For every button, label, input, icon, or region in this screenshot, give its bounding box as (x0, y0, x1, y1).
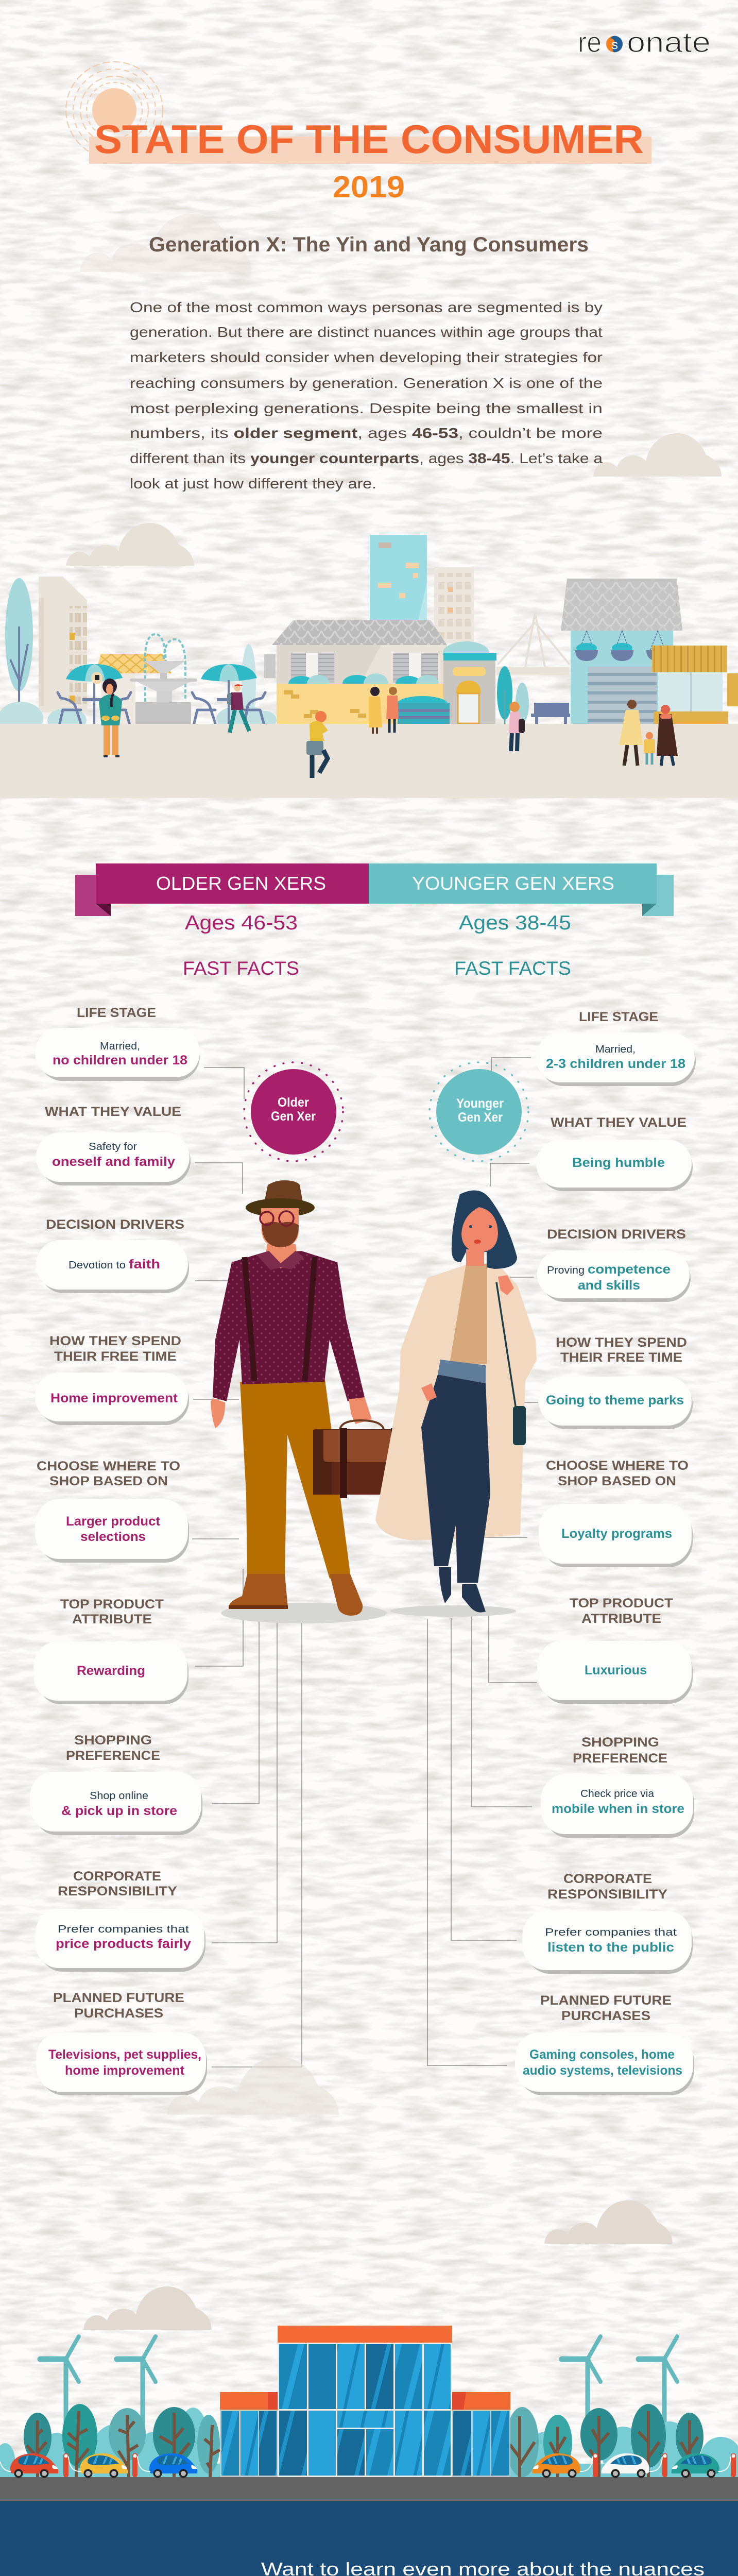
figure shadows (221, 1603, 516, 1623)
fact: shopping preference (older): PREFERENCE (66, 1749, 160, 1763)
illustration: city street scene (0, 535, 738, 798)
fact: choose where to shop (older) (35, 1459, 189, 1563)
logo: resonate: s (611, 37, 618, 52)
badge: younger gen xer: Younger (456, 1096, 504, 1111)
fact: shopping preference (younger): Check price via (580, 1788, 655, 1800)
fact: shopping preference (younger) (541, 1735, 694, 1838)
fact: decision drivers (younger): Proving (547, 1265, 585, 1276)
fact: what they value (older): oneself and family (52, 1155, 175, 1169)
person: pink jacket (509, 702, 525, 751)
intro paragraph (130, 299, 603, 492)
fast facts headings: FAST FACTS (454, 958, 571, 979)
fact: shopping preference (older): & pick up in store (61, 1804, 177, 1818)
electric cars and chargers (0, 2453, 736, 2478)
fact: decision drivers (older): Devotion to (68, 1260, 126, 1271)
fact: free time (younger): THEIR FREE TIME (560, 1350, 682, 1365)
fact: what they value (younger): Being humble (572, 1156, 665, 1170)
badge: younger gen xer (430, 1062, 528, 1161)
fact: top product attribute (younger) (537, 1596, 693, 1704)
fact: life stage (younger): LIFE STAGE (579, 1010, 658, 1024)
fact: planned purchases (younger): Gaming consoles, home (529, 2047, 675, 2062)
fact: free time (older): HOW THEY SPEND (49, 1334, 181, 1348)
fact: choose where to shop (younger): CHOOSE WHERE TO (546, 1459, 689, 1473)
fact: corporate responsibility (older): price products fairly (56, 1937, 191, 1951)
panel: download call to action (0, 2501, 738, 2576)
title block: STATE OF THE CONSUMER (94, 116, 644, 162)
connector lines (192, 1058, 538, 2067)
fact: corporate responsibility (younger): CORPORATE (563, 1872, 652, 1886)
intro paragraph: marketers should consider when developing their strategies for (130, 349, 603, 365)
fact: what they value (younger): WHAT THEY VALUE (551, 1115, 686, 1130)
fact: planned purchases (younger): PLANNED FUTURE (540, 1993, 672, 2008)
trees (24, 2404, 703, 2477)
fact: corporate responsibility (older): Prefer companies that (58, 1924, 190, 1935)
house with scale roof (264, 620, 447, 724)
fountain and yellow roof (95, 634, 277, 732)
fact: life stage (younger): Married, (595, 1044, 636, 1055)
wind turbines (40, 2336, 677, 2449)
fact: top product attribute (older): TOP PRODUCT (60, 1597, 164, 1612)
fact: top product attribute (older): Rewarding (77, 1664, 145, 1678)
ground (0, 724, 738, 798)
people: family of three (619, 700, 678, 766)
fact: top product attribute (younger): ATTRIBUTE (581, 1612, 661, 1626)
intro paragraph: generation. But there are distinct nuances within age groups that (130, 324, 603, 340)
fact: planned purchases (older): PURCHASES (74, 2006, 163, 2021)
fact: decision drivers (younger): DECISION DRIVERS (547, 1227, 686, 1242)
badge: older gen xer: Older (278, 1095, 309, 1110)
fact: decision drivers (older) (36, 1217, 189, 1293)
cloud (66, 523, 194, 566)
office building (220, 2326, 510, 2477)
icon: sun with dashed rings (66, 62, 163, 159)
fact: shopping preference (younger): PREFERENCE (573, 1751, 667, 1766)
fact: what they value (older) (36, 1105, 191, 1185)
fact: free time (younger) (539, 1335, 693, 1429)
bridge (496, 613, 570, 675)
logo: resonate (578, 26, 711, 58)
market building with hanging planters (561, 579, 738, 724)
age labels: Ages 38-45 (459, 912, 571, 934)
fact: decision drivers (younger): and skills (578, 1278, 640, 1293)
figure: younger woman (375, 1190, 537, 1613)
fact: life stage (older): Married, (100, 1041, 140, 1052)
person: walker with red cap (227, 684, 249, 733)
title block: 2019 (333, 170, 405, 204)
cafe umbrellas, tables and chairs (58, 664, 265, 724)
fact: top product attribute (older) (33, 1597, 188, 1704)
fact: shopping preference (older): Shop online (90, 1790, 148, 1802)
fact: what they value (older): Safety for (89, 1141, 137, 1153)
intro paragraph: most perplexing generations. Despite being the smallest in (130, 400, 603, 416)
age labels (185, 912, 571, 934)
illustration: green building with cars (0, 2326, 738, 2501)
badge: older gen xer: Gen Xer (271, 1109, 316, 1124)
logo: resonate: onate (627, 26, 711, 58)
cloud (593, 433, 722, 477)
fact: corporate responsibility (older): CORPORATE (73, 1869, 161, 1884)
badge: older gen xer (244, 1062, 343, 1161)
fact: life stage (younger) (536, 1010, 696, 1086)
fact: corporate responsibility (older): RESPONSIBILITY (58, 1884, 177, 1899)
subtitle: Generation X: The Yin and Yang Consumers (149, 233, 589, 256)
corner shop and planter (397, 641, 496, 724)
age labels: Ages 46-53 (185, 912, 298, 934)
cloud (83, 2286, 212, 2330)
background bushes (0, 2408, 738, 2486)
fact: choose where to shop (older): selections (80, 1530, 146, 1544)
banner: older vs younger: YOUNGER GEN XERS (412, 873, 614, 894)
fact: choose where to shop (younger): SHOP BASED ON (558, 1474, 676, 1488)
fact: choose where to shop (younger): Loyalty programs (561, 1527, 672, 1541)
fact: free time (younger): Going to theme parks (546, 1393, 684, 1408)
fact: free time (older) (35, 1334, 189, 1425)
banner: older vs younger: OLDER GEN XERS (156, 873, 326, 894)
title block (89, 116, 651, 204)
cloud (167, 2057, 339, 2115)
fact: planned purchases (older): home improvement (65, 2063, 185, 2078)
cloud (544, 2200, 673, 2244)
fact: decision drivers (younger) (537, 1227, 691, 1302)
intro paragraph: numbers, its older segment , ages 46-53 , couldn’t be more (130, 425, 603, 441)
fact: top product attribute (younger): Luxurious (585, 1663, 647, 1677)
fact: corporate responsibility (older) (35, 1869, 205, 1972)
fact: planned purchases (younger): PURCHASES (561, 2009, 650, 2023)
fact: choose where to shop (younger) (539, 1459, 693, 1567)
fact: choose where to shop (older): Larger product (66, 1514, 161, 1529)
fact: decision drivers (older): faith (129, 1257, 160, 1272)
fast facts headings: FAST FACTS (183, 958, 299, 979)
road (0, 2477, 738, 2501)
fact: free time (younger): HOW THEY SPEND (556, 1335, 687, 1350)
roadside trees and bench (497, 666, 570, 724)
intro paragraph: reaching consumers by generation. Generation X is one of the (130, 375, 603, 391)
fact: shopping preference (older): SHOPPING (74, 1733, 152, 1748)
fact: shopping preference (older) (30, 1733, 202, 1835)
fact: planned purchases (younger): audio systems, televisions (523, 2063, 682, 2078)
fact: free time (older): THEIR FREE TIME (54, 1349, 177, 1364)
fact: corporate responsibility (younger): listen to the public (547, 1940, 674, 1955)
fact: life stage (older): LIFE STAGE (77, 1006, 156, 1020)
fact: shopping preference (younger): SHOPPING (581, 1735, 659, 1750)
fact: planned purchases (older): Televisions, pet supplies, (48, 2047, 201, 2062)
fact: corporate responsibility (younger): Prefer companies that (545, 1927, 677, 1938)
fact: decision drivers (older): DECISION DRIVERS (46, 1217, 184, 1232)
beige tower (434, 567, 474, 643)
teal tower (370, 535, 427, 620)
fact: what they value (older): WHAT THEY VALUE (45, 1105, 181, 1119)
fact: corporate responsibility (younger) (522, 1872, 693, 1974)
people: two women talking (369, 687, 399, 734)
fact: life stage (older): no children under 18 (53, 1053, 187, 1067)
fast facts headings (183, 958, 571, 979)
fact: free time (older): Home improvement (50, 1391, 178, 1405)
fact: top product attribute (younger): TOP PRODUCT (570, 1596, 673, 1611)
person: yellow top with bag (306, 711, 328, 778)
fact: what they value (younger) (536, 1115, 693, 1191)
intro paragraph: look at just how different they are. (130, 476, 376, 492)
intro paragraph: different than its younger counterparts , ages 38-45 . Let’s take a (130, 450, 603, 466)
intro paragraph: One of the most common ways personas are segmented is by (130, 299, 603, 315)
fact: planned purchases (older): PLANNED FUTURE (53, 1991, 184, 2005)
fact: choose where to shop (older): SHOP BASED ON (49, 1474, 168, 1488)
badge: younger gen xer: Gen Xer (458, 1110, 503, 1125)
fact: life stage (younger): 2-3 children under 18 (546, 1057, 685, 1071)
person: woman on phone (99, 679, 122, 757)
fact: choose where to shop (older): CHOOSE WHERE TO (37, 1459, 180, 1473)
figure: older man (211, 1180, 404, 1616)
fact: planned purchases (younger) (515, 1993, 694, 2095)
trees and apartment building left (0, 577, 87, 736)
cloud (80, 214, 252, 272)
fact: decision drivers (younger): competence (588, 1262, 671, 1277)
fact: corporate responsibility (younger): RESPONSIBILITY (547, 1887, 667, 1902)
fact: life stage (older) (35, 1006, 200, 1081)
fact: top product attribute (older): ATTRIBUTE (72, 1612, 152, 1626)
banner: older vs younger (75, 863, 674, 916)
fact: planned purchases (older) (36, 1991, 207, 2095)
logo: resonate: re (578, 26, 602, 58)
fact: shopping preference (younger): mobile when in store (552, 1802, 684, 1816)
